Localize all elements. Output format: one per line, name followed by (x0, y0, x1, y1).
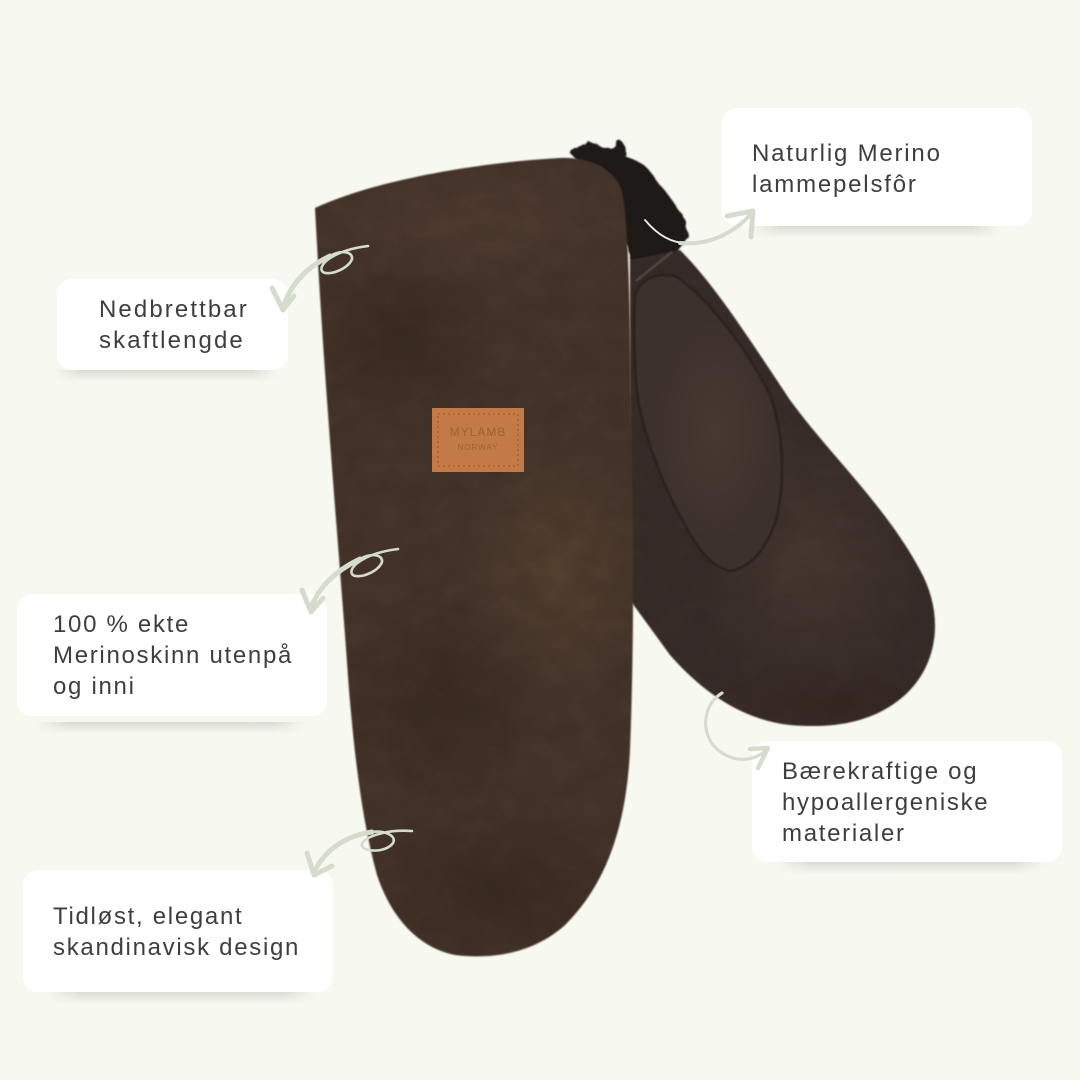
callout: sustainable materials (752, 741, 1062, 871)
callout: merino skin: Merinoskinn utenpå (53, 642, 293, 669)
callout: timeless design: Tidløst, elegant (53, 903, 243, 930)
leather label: NORWAY (458, 443, 498, 452)
callout: sustainable materials: hypoallergeniske (782, 789, 989, 816)
arrow: fold-down shaft (272, 246, 368, 310)
callout: lining: lammepelsfôr (752, 171, 918, 198)
callout: sustainable materials: Bærekraftige og (782, 758, 978, 785)
arrow: merino skin (302, 549, 398, 612)
callout: timeless design (23, 870, 333, 1001)
callout: fold-down shaft: Nedbrettbar (99, 296, 249, 323)
back mitten (630, 250, 960, 740)
callout: lining (722, 108, 1032, 235)
fur lining (572, 141, 688, 295)
leather label: MYLAMB (450, 425, 506, 439)
illustration: pair of brown mittens (314, 138, 936, 958)
callout: lining: Naturlig Merino (752, 140, 942, 167)
leather label (432, 408, 524, 472)
seam (636, 252, 672, 281)
callout: fold-down shaft: skaftlengde (99, 327, 245, 354)
arrow: sustainable materials (706, 693, 768, 768)
callout: merino skin: 100 % ekte (53, 611, 190, 638)
front mitten (314, 156, 634, 958)
callout: merino skin: og inni (53, 673, 136, 700)
callout: fold-down shaft (57, 279, 288, 379)
arrow: lining (645, 211, 753, 243)
callout: merino skin (17, 594, 327, 731)
callout: timeless design: skandinavisk design (53, 934, 300, 961)
arrow: timeless design (307, 831, 412, 875)
thumb (634, 275, 782, 571)
callout: sustainable materials: materialer (782, 820, 906, 847)
